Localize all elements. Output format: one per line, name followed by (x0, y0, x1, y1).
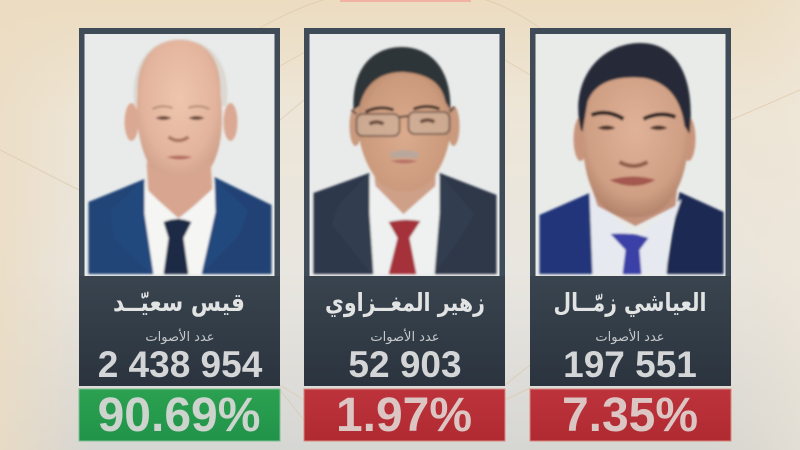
votes label: عدد الأصوات (145, 328, 215, 345)
panel: Ayachi Zammel (530, 28, 731, 386)
top red bar (340, 0, 471, 2)
percentage: 7.35%: 7.35% (562, 389, 698, 442)
votes count: 197 551 (563, 344, 697, 385)
portrait: Ayachi Zammel (536, 34, 726, 276)
panel: Kais Saied (79, 28, 280, 386)
candidate name: قيس سعيّــد (113, 288, 245, 317)
percentage: 7.35% (530, 389, 731, 442)
name and votes block (530, 276, 731, 386)
name and votes block (79, 276, 280, 386)
portrait: Zouhair Maghzaoui (310, 34, 500, 276)
votes label: عدد الأصوات (370, 328, 440, 345)
candidate name: زهير المغــزاوي (325, 288, 485, 318)
percentage: 90.69%: 90.69% (98, 389, 260, 442)
name and votes block (304, 276, 505, 386)
candidate name: العياشي زمّــال (554, 288, 706, 317)
portrait: Kais Saied (84, 34, 274, 276)
votes label: عدد الأصوات (595, 328, 665, 345)
votes count: 2 438 954 (98, 344, 263, 385)
panel: Zouhair Maghzaoui (304, 28, 505, 386)
percentage: 1.97% (304, 389, 505, 442)
votes count: 52 903 (348, 344, 462, 385)
percentage: 1.97%: 1.97% (336, 389, 472, 442)
